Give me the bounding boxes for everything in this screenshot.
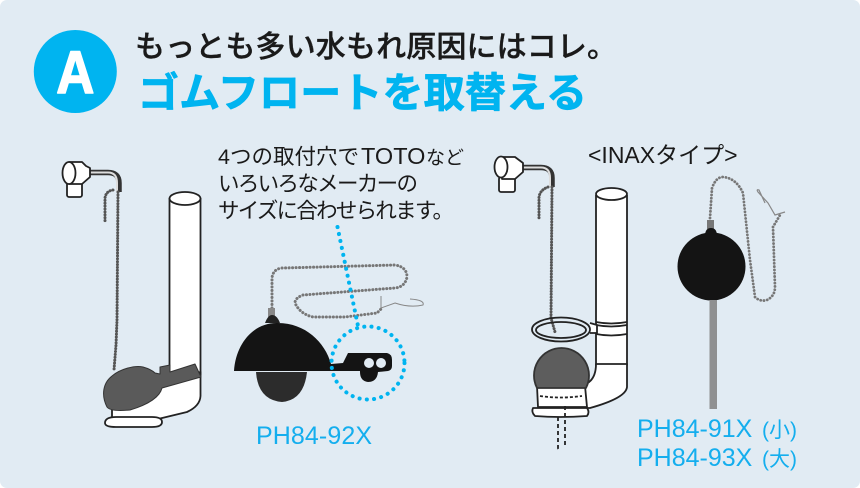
chain: hanging bead chain	[105, 190, 118, 370]
label: PH84-91X and PH84-93X: PH84-91X	[637, 415, 752, 443]
stem rod	[710, 300, 717, 409]
label: PH84-91X and PH84-93X: (大)	[762, 448, 797, 471]
chain: bead chain with hook	[710, 177, 785, 301]
tube elbow base	[112, 372, 200, 419]
callout text: mounting holes	[218, 143, 464, 223]
callout text: mounting holes: サイズに合わせられます。	[218, 199, 454, 223]
valve seat	[532, 386, 588, 450]
chain: hanging bead chain	[539, 187, 555, 332]
product: PH84-92X float	[234, 265, 423, 402]
callout text: mounting holes: 4つの取付穴で	[218, 145, 359, 169]
callout text: mounting holes: いろいろなメーカーの	[218, 172, 418, 196]
rubber float, closed	[104, 364, 201, 411]
overflow tube	[596, 188, 627, 367]
product: PH84-91X / 93X ball float	[678, 177, 785, 409]
base flange	[105, 417, 162, 427]
label: INAX type: <INAXタイプ>	[588, 142, 738, 168]
diagram: flush valve with ball float, INAX type	[494, 156, 627, 450]
guide ring	[532, 318, 597, 342]
overflow tube	[170, 192, 200, 375]
badge: A	[34, 30, 117, 113]
label: PH84-91X and PH84-93X: PH84-93X	[637, 444, 752, 472]
callout text: mounting holes: など	[426, 147, 464, 169]
icon: lever handle and arm	[494, 156, 552, 192]
heading: lead line: もっとも多い水もれ原因にはコレ。	[135, 31, 617, 64]
callout text: mounting holes: TOTO	[361, 143, 425, 169]
badge: A: A	[56, 39, 94, 106]
tube elbow base	[580, 364, 627, 408]
heading: main title: ゴムフロートを取替える	[138, 70, 587, 116]
black rubber ball	[678, 228, 746, 300]
icon: lever handle and arm	[62, 162, 119, 197]
label: PH84-91X and PH84-93X	[637, 415, 797, 472]
rubber float dome and tab	[234, 308, 392, 402]
chain: bead chain with hook	[272, 265, 423, 317]
label: PH84-91X and PH84-93X: (小)	[762, 419, 797, 442]
label: PH84-92X: PH84-92X	[256, 422, 372, 450]
rubber ball float, closed	[534, 348, 589, 388]
diagram: flush valve with rubber float, TOTO type	[62, 162, 201, 427]
grommet stem	[707, 220, 714, 229]
dotted pointer line and circle	[332, 227, 404, 400]
